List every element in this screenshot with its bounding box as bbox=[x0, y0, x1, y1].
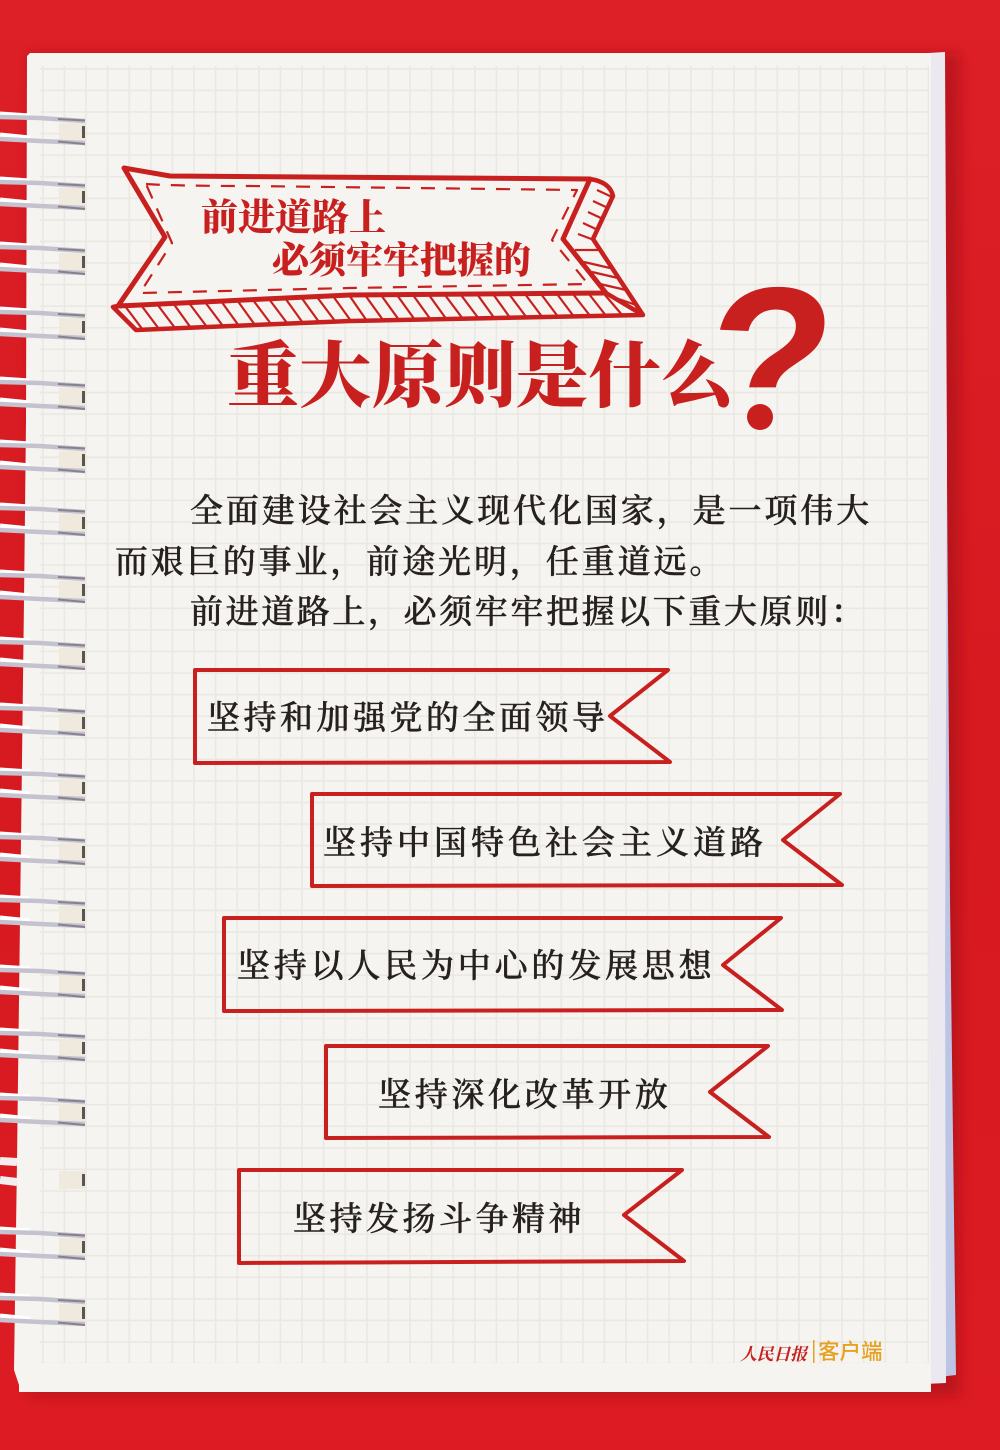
banner text: 必须牢牢把握的 bbox=[272, 239, 531, 282]
intro text: 前进道路上，必须牢牢把握以下重大原则： bbox=[190, 594, 866, 631]
banner back fill bbox=[114, 179, 643, 331]
main heading: 重大原则是什么 bbox=[227, 337, 740, 417]
ribbon 3: 坚持以人民为中心的发展思想 bbox=[237, 948, 715, 985]
publisher logo bbox=[740, 1340, 883, 1364]
intro text bbox=[115, 493, 872, 631]
title banner bbox=[113, 168, 643, 331]
intro text: 全面建设社会主义现代化国家，是一项伟大 bbox=[190, 493, 872, 530]
banner outline bbox=[118, 168, 606, 306]
ribbon 4 bbox=[326, 1046, 769, 1138]
banner stitching bbox=[140, 184, 588, 293]
banner folds bbox=[113, 179, 643, 330]
ribbon 5 bbox=[239, 1170, 684, 1263]
ribbon 5: 坚持发扬斗争精神 bbox=[293, 1201, 585, 1238]
question mark bbox=[720, 286, 824, 430]
ribbon 3 bbox=[224, 918, 782, 1011]
ribbon 1: 坚持和加强党的全面领导 bbox=[207, 700, 608, 737]
question mark: ? bbox=[695, 245, 845, 474]
banner text: 前进道路上 bbox=[201, 197, 386, 239]
publisher logo: 人民日报 bbox=[740, 1345, 809, 1364]
ribbon 2: 坚持中国特色社会主义道路 bbox=[323, 825, 767, 862]
intro text: 而艰巨的事业，前途光明，任重道远。 bbox=[115, 544, 725, 581]
banner hatching bbox=[125, 190, 636, 330]
ribbon 2 bbox=[312, 794, 842, 886]
publisher logo: 客户端 bbox=[818, 1340, 883, 1364]
notebook page stack bbox=[925, 52, 956, 1384]
ribbon 4: 坚持深化改革开放 bbox=[378, 1077, 672, 1114]
spiral binding bbox=[0, 114, 85, 1325]
banner text bbox=[201, 197, 531, 282]
ribbon 1 bbox=[195, 670, 670, 763]
